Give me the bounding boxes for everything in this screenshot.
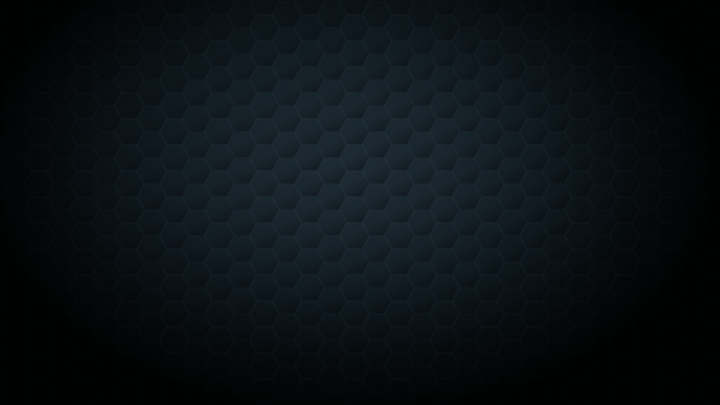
hexagon pattern: [156, 26, 543, 300]
